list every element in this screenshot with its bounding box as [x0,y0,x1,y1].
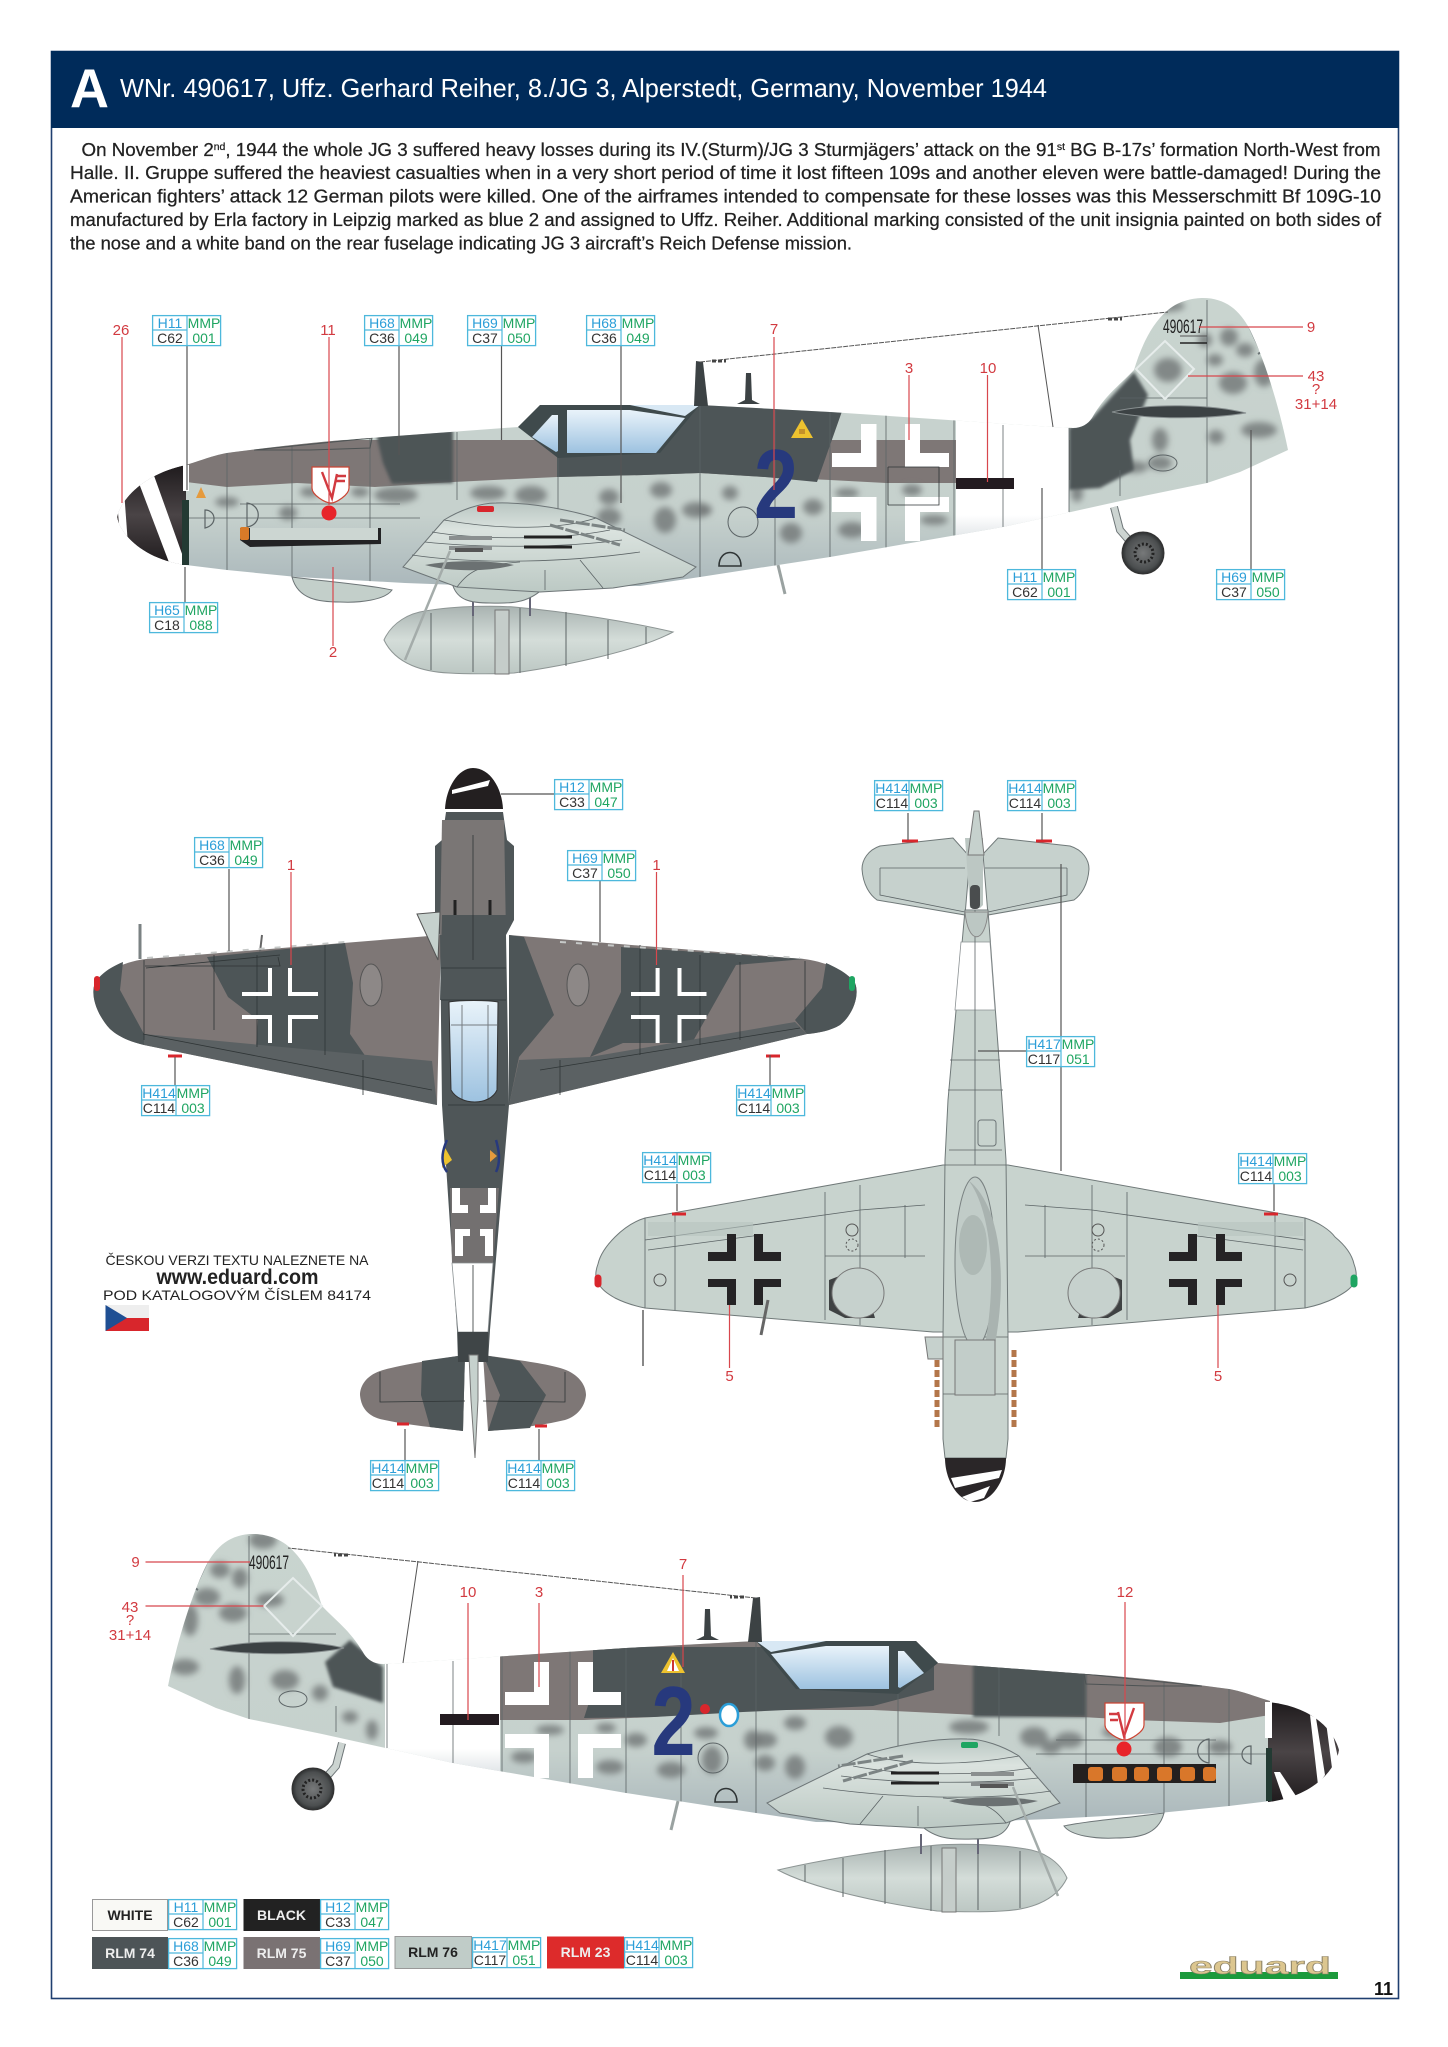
wings [93,924,857,1105]
paint code H11: 001 [1047,584,1071,600]
item number 5: 5 [1214,1368,1222,1385]
warning triangle [791,419,813,438]
paint code H414: 003 [776,1100,800,1116]
national cross [832,424,949,541]
code H417: H417 [473,1937,507,1953]
item number 10: 10 [980,360,996,377]
gun trough [240,528,381,547]
callouts: top view [142,779,805,1491]
tail band black bar [440,1714,499,1725]
code H69 [321,1938,389,1969]
wing and canopy [767,1739,1060,1896]
intro text: American fighters’ attack 12 German pilots were killed. One of the airframes intended to compensate for these losses was this Messerschmitt Bf 109G-10 [70,186,1381,206]
code H414 [625,1937,693,1968]
item number 12: 12 [1117,1584,1133,1601]
spinner [1265,1702,1339,1802]
code H68: C36 [173,1953,199,1969]
Czech flag [106,1305,149,1331]
code H11 [169,1899,237,1930]
swatch RLM 76: RLM 76 [408,1944,458,1960]
swatch RLM 76 [395,1936,472,1968]
item number 5: 5 [725,1368,734,1385]
code H12: H12 [325,1899,351,1915]
paint code H414: H414 [142,1085,176,1101]
paint code H414: MMP [910,780,942,796]
header bar [51,51,1399,128]
page number: 11 [1374,1979,1393,1999]
eduard logo: eduard [1189,1953,1331,1980]
paint code H69 [468,315,536,346]
paint code H414 [142,1085,210,1116]
item number 1: 1 [287,857,295,874]
red and blue roundel stencils [700,1704,738,1726]
item number 7: 7 [770,321,778,338]
swatch WHITE: WHITE [107,1907,153,1923]
code H68: H68 [173,1938,199,1954]
code H12: C33 [325,1914,351,1930]
code H417: MMP [508,1937,540,1953]
intro text: On November 2 [82,140,209,160]
paint code H414: 003 [914,795,938,811]
paint code H414: 003 [546,1475,570,1491]
paint code H69: H69 [472,315,498,331]
paint code H414: 003 [682,1167,706,1183]
fuselage left [116,298,1294,660]
intro text [70,140,1382,254]
Czech version note: www.eduard.com [156,1266,318,1289]
tactical number 2: 2 [652,1666,696,1776]
paint code H414 [737,1085,805,1116]
paint code H414: MMP [406,1460,438,1476]
white wing crosses [242,968,706,1043]
swatch RLM 74 [92,1937,168,1969]
paint code H68: 049 [234,852,258,868]
item numbers 43, 31+14: 43 [122,1599,138,1616]
code H68: 049 [208,1953,232,1969]
item number 26: 26 [113,322,129,339]
paint code H414: H414 [1008,780,1042,796]
paint code H417: C117 [1028,1051,1060,1067]
paint code H68: 049 [626,330,650,346]
item number 9: 9 [131,1554,140,1571]
paint code H68: MMP [622,315,654,331]
item numbers 43, 31+14 [109,1599,151,1644]
fin diamond [264,1578,322,1636]
fuselage right [162,1531,1339,1896]
paint code H68: H68 [199,837,225,853]
paint code H68: C36 [369,330,395,346]
intro text: Halle. II. Gruppe suffered the heaviest casualties when in a very short period of time it lost fifteen 109s and another eleven were battle-damaged! During the [70,163,1381,183]
spinner top [445,768,503,809]
spinner [116,465,186,565]
small stencil [1180,335,1207,337]
paint code H68: MMP [400,315,432,331]
paint code H414: MMP [1274,1153,1306,1169]
paint code H12: C33 [559,794,585,810]
intro text: st [1057,142,1065,153]
item number 10: 10 [460,1584,476,1601]
paint code H414: C114 [1009,795,1041,811]
paint code H11: H11 [158,315,183,331]
item numbers 43, 31+14: 31+14 [1295,396,1337,413]
werknummer: 490617 [1163,317,1203,338]
black wing crosses [708,1234,1242,1305]
paint code H414: C114 [876,795,908,811]
paint code H65: 088 [189,617,213,633]
paint code H69: 050 [507,330,531,346]
profile letter: A [70,57,109,119]
paint code H414: C114 [1240,1168,1272,1184]
paint code H414: H414 [875,780,909,796]
paint code H68: 049 [404,330,428,346]
item number 1: 1 [652,857,661,874]
tailplane [360,1355,586,1431]
paint code H417 [1027,1036,1095,1067]
paint code H68: C36 [199,852,225,868]
intro text: the nose and a white band on the rear fuselage indicating JG 3 aircraft’s Reich Defense mission. [70,234,852,254]
code H11: H11 [174,1899,199,1915]
paint code H414: H414 [737,1085,771,1101]
code H69: C37 [325,1953,351,1969]
swatch RLM 75: RLM 75 [257,1945,307,1961]
swatch RLM 23: RLM 23 [561,1944,611,1960]
paint code H69: 050 [1256,584,1280,600]
paint code H69: C37 [1221,584,1247,600]
JG3 shield [1105,1703,1144,1740]
paint code H414: C114 [143,1100,175,1116]
code H417 [473,1937,541,1968]
swatch BLACK [244,1899,320,1931]
paint code H414: 003 [1278,1168,1302,1184]
fuselage top [417,812,514,1362]
aircraft: left side profile [116,298,1294,674]
paint code H414: C114 [738,1100,770,1116]
paint code H414 [1008,780,1076,811]
paint code H11: C62 [157,330,183,346]
paint code H414 [371,1460,439,1491]
colour legend [92,1899,693,1969]
code H414: MMP [660,1937,692,1953]
paint code H68 [195,837,263,868]
paint code H65: H65 [154,602,180,618]
item number 2: 2 [329,644,337,661]
intro text: BG B-17s’ formation North-West from [1065,140,1381,160]
paint code H417: MMP [1062,1036,1094,1052]
code H414: C114 [626,1952,658,1968]
Czech version note: POD KATALOGOVÝM ČÍSLEM 84174 [103,1287,371,1303]
tactical number 2: 2 [754,429,798,539]
paint code H69 [1217,569,1285,600]
paint code H68 [587,315,655,346]
paint code H417: H417 [1027,1036,1061,1052]
Czech version note [103,1252,371,1331]
item number 11: 11 [320,322,336,339]
paint code H414 [643,1152,711,1183]
code H417: C117 [474,1952,506,1968]
warning triangle [661,1652,685,1673]
intro text: , 1944 the whole JG 3 suffered heavy losses during its IV.(Sturm)/JG 3 Sturmjägers’ attack on the 91 [225,140,1057,160]
code H69: 050 [360,1953,384,1969]
stabilizers [862,838,1089,915]
wing light [477,506,494,512]
JG3 shield [312,467,349,503]
paint code H65: C18 [154,617,180,633]
paint code H69 [568,850,636,881]
paint code H68: MMP [230,837,262,853]
paint code H414: MMP [1043,780,1075,796]
swatch RLM 75 [244,1937,320,1969]
aircraft: underside view [596,811,1356,1502]
tail band black bar [956,478,1014,489]
paint code H414: MMP [678,1152,710,1168]
paint code H69: H69 [1221,569,1247,585]
paint code H414: H414 [643,1152,677,1168]
wing light [961,1742,978,1748]
fin diamond [1136,341,1194,399]
paint code H414: MMP [772,1085,804,1101]
paint code H414 [875,780,943,811]
heading: WNr. 490617, Uffz. Gerhard Reiher, 8./JG 3, Alperstedt, Germany, November 1944 [120,73,1047,103]
code H414: H414 [625,1937,659,1953]
paint code H11: H11 [1013,569,1038,585]
paint code H69: C37 [472,330,498,346]
national cross [505,1662,621,1778]
item number 3: 3 [535,1584,543,1601]
item number 3: 3 [905,360,913,377]
paint code H12 [555,779,623,810]
fuselage underside [925,811,1015,1458]
intro text: manufactured by Erla factory in Leipzig marked as blue 2 and assigned to Uffz. Reiher. Additional marking consisted of the unit insignia painted on both sides of [70,210,1382,230]
paint code H69: C37 [572,865,598,881]
paint code H68: C36 [591,330,617,346]
callouts: right side profile [109,1554,1133,1740]
paint code H414: H414 [507,1460,541,1476]
swatch BLACK: BLACK [257,1907,306,1923]
paint code H414: C114 [644,1167,676,1183]
paint code H414: MMP [177,1085,209,1101]
code H69: MMP [356,1938,388,1954]
wings underside [596,1165,1356,1366]
paint code H414: C114 [508,1475,540,1491]
item numbers 43, 31+14: ? [1312,381,1320,398]
paint code H417: 051 [1066,1051,1090,1067]
paint code H12: MMP [590,779,622,795]
swatch RLM 23 [547,1936,624,1968]
paint code H68 [365,315,433,346]
code H11: C62 [173,1914,199,1930]
paint code H11: MMP [1043,569,1075,585]
werknummer: 490617 [249,1553,289,1574]
paint code H414 [507,1460,575,1491]
exhaust row [1073,1764,1216,1783]
aircraft: right side profile [162,1531,1339,1912]
code H414: 003 [664,1952,688,1968]
item numbers 43, 31+14: 31+14 [109,1627,151,1644]
intro text: nd [214,142,225,153]
paint code H65: MMP [185,602,217,618]
paint code H414: MMP [542,1460,574,1476]
aircraft: top view [93,768,857,1458]
paint code H69: MMP [503,315,535,331]
Czech version note: ČESKOU VERZI TEXTU NALEZNETE NA [106,1252,369,1268]
swatch WHITE [92,1900,168,1930]
code H11: MMP [204,1899,236,1915]
swatch RLM 74: RLM 74 [105,1945,155,1961]
paint code H68: H68 [591,315,617,331]
paint code H414: H414 [1239,1153,1273,1169]
item number 9: 9 [1307,319,1315,336]
paint code H69: MMP [1252,569,1284,585]
callouts: left side profile [113,315,1337,661]
paint code H12: H12 [559,779,585,795]
paint code H11: MMP [188,315,220,331]
eduard logo [1180,1953,1338,1980]
paint code H414: 003 [1047,795,1071,811]
code H12: MMP [356,1899,388,1915]
paint code H414: C114 [372,1475,404,1491]
paint code H11 [1008,569,1076,600]
code H69: H69 [325,1938,351,1954]
paint code H69: 050 [607,865,631,881]
paint code H414: 003 [181,1100,205,1116]
paint code H11 [153,315,221,346]
code H12: 047 [360,1914,384,1930]
paint code H68: H68 [369,315,395,331]
paint code H414: H414 [371,1460,405,1476]
paint code H69: MMP [603,850,635,866]
paint code H69: H69 [572,850,598,866]
code H68: MMP [204,1938,236,1954]
item numbers 43, 31+14: ? [126,1612,134,1629]
paint code H11: 001 [192,330,216,346]
paint code H12: 047 [594,794,618,810]
wing and canopy [403,503,696,660]
rudder [469,1355,478,1458]
paint code H414: 003 [410,1475,434,1491]
item numbers 43, 31+14: 43 [1308,368,1324,385]
paint code H65 [150,602,218,633]
paint code H414 [1239,1153,1307,1184]
wheel bays [829,1268,1122,1318]
spinner underside [945,1458,1006,1502]
code H68 [169,1938,237,1969]
callouts: underside view [643,780,1307,1385]
code H11: 001 [208,1914,232,1930]
item numbers 43, 31+14 [1295,368,1337,413]
code H417: 051 [512,1952,536,1968]
item number 7: 7 [679,1556,687,1573]
code H12 [321,1899,389,1930]
paint code H11: C62 [1012,584,1038,600]
